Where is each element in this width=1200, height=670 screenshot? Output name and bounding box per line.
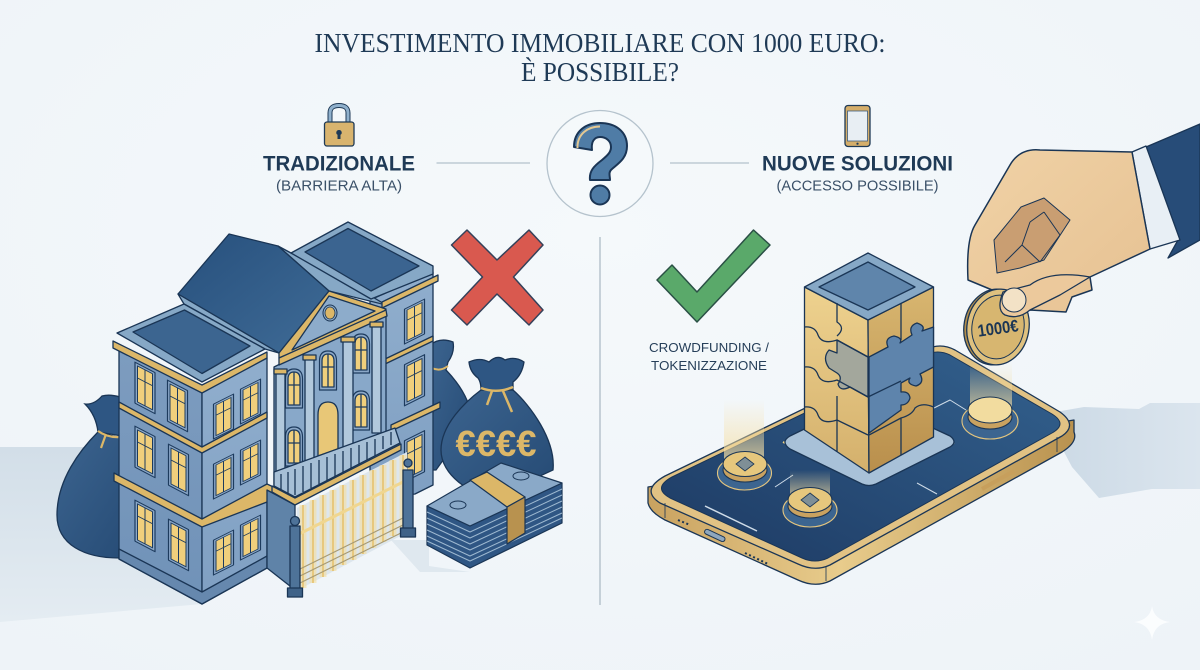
puzzle pieces blue — [869, 323, 934, 433]
thumb — [1000, 275, 1090, 317]
phone screen — [661, 352, 1060, 561]
back wing — [278, 222, 440, 500]
paper band — [470, 472, 525, 507]
shadow: building ground — [0, 447, 202, 622]
coin 1000 euro: 1000€ — [976, 316, 1020, 341]
building — [113, 222, 440, 604]
columns — [276, 325, 381, 484]
icon: question mark — [574, 123, 627, 204]
icon: padlock — [324, 106, 354, 146]
title: È POSSIBILE? — [521, 57, 679, 87]
port and buttons — [665, 437, 1057, 581]
puzzle seams — [804, 327, 868, 435]
label: crowdfunding: TOKENIZZAZIONE — [651, 358, 767, 373]
heading: nuove soluzioni — [762, 152, 953, 194]
smartphone — [648, 346, 1075, 584]
shirt cuff — [1132, 146, 1180, 249]
door — [318, 402, 338, 456]
coin 1 — [718, 400, 772, 490]
money bag: back right — [430, 340, 472, 470]
tower base plate — [785, 398, 954, 486]
main roof — [178, 234, 329, 353]
coin 3 — [962, 362, 1018, 439]
shadow: phone and hand — [1044, 403, 1200, 498]
coin 1000 euro — [958, 284, 1035, 370]
heading: tradizionale: (BARRIERA ALTA) — [276, 178, 402, 194]
stack of banknotes — [427, 463, 562, 568]
heading: tradizionale — [263, 152, 415, 194]
hand holding coin — [958, 124, 1200, 370]
left wing — [113, 304, 280, 604]
palm and fingers — [968, 150, 1150, 315]
balcony — [272, 428, 401, 505]
title: INVESTIMENTO IMMOBILIARE CON 1000 EURO: — [314, 28, 886, 58]
euro symbols: €€€€ — [456, 423, 536, 464]
coin 2 — [783, 470, 837, 527]
heading: nuove soluzioni: NUOVE SOLUZIONI — [762, 152, 953, 176]
icon: green check — [657, 230, 770, 322]
gate posts — [290, 526, 300, 590]
label: crowdfunding: CROWDFUNDING / — [649, 340, 769, 355]
heading: tradizionale: TRADIZIONALE — [263, 152, 415, 176]
icon: smartphone — [845, 106, 870, 146]
sleeve — [1146, 124, 1200, 258]
label: crowdfunding — [649, 340, 769, 373]
circle with question mark — [547, 110, 653, 216]
money bag: euro — [441, 357, 553, 497]
puzzle tower — [785, 253, 954, 486]
money bag: left — [57, 395, 140, 558]
central portico — [267, 291, 387, 590]
shadow: gate ground — [391, 540, 470, 572]
watermark sparkle — [1134, 606, 1170, 640]
token coins — [718, 362, 1018, 527]
title — [314, 28, 886, 87]
icon: red cross — [452, 230, 543, 325]
heading: nuove soluzioni: (ACCESSO POSSIBILE) — [776, 178, 938, 194]
glowing gate — [288, 452, 416, 597]
